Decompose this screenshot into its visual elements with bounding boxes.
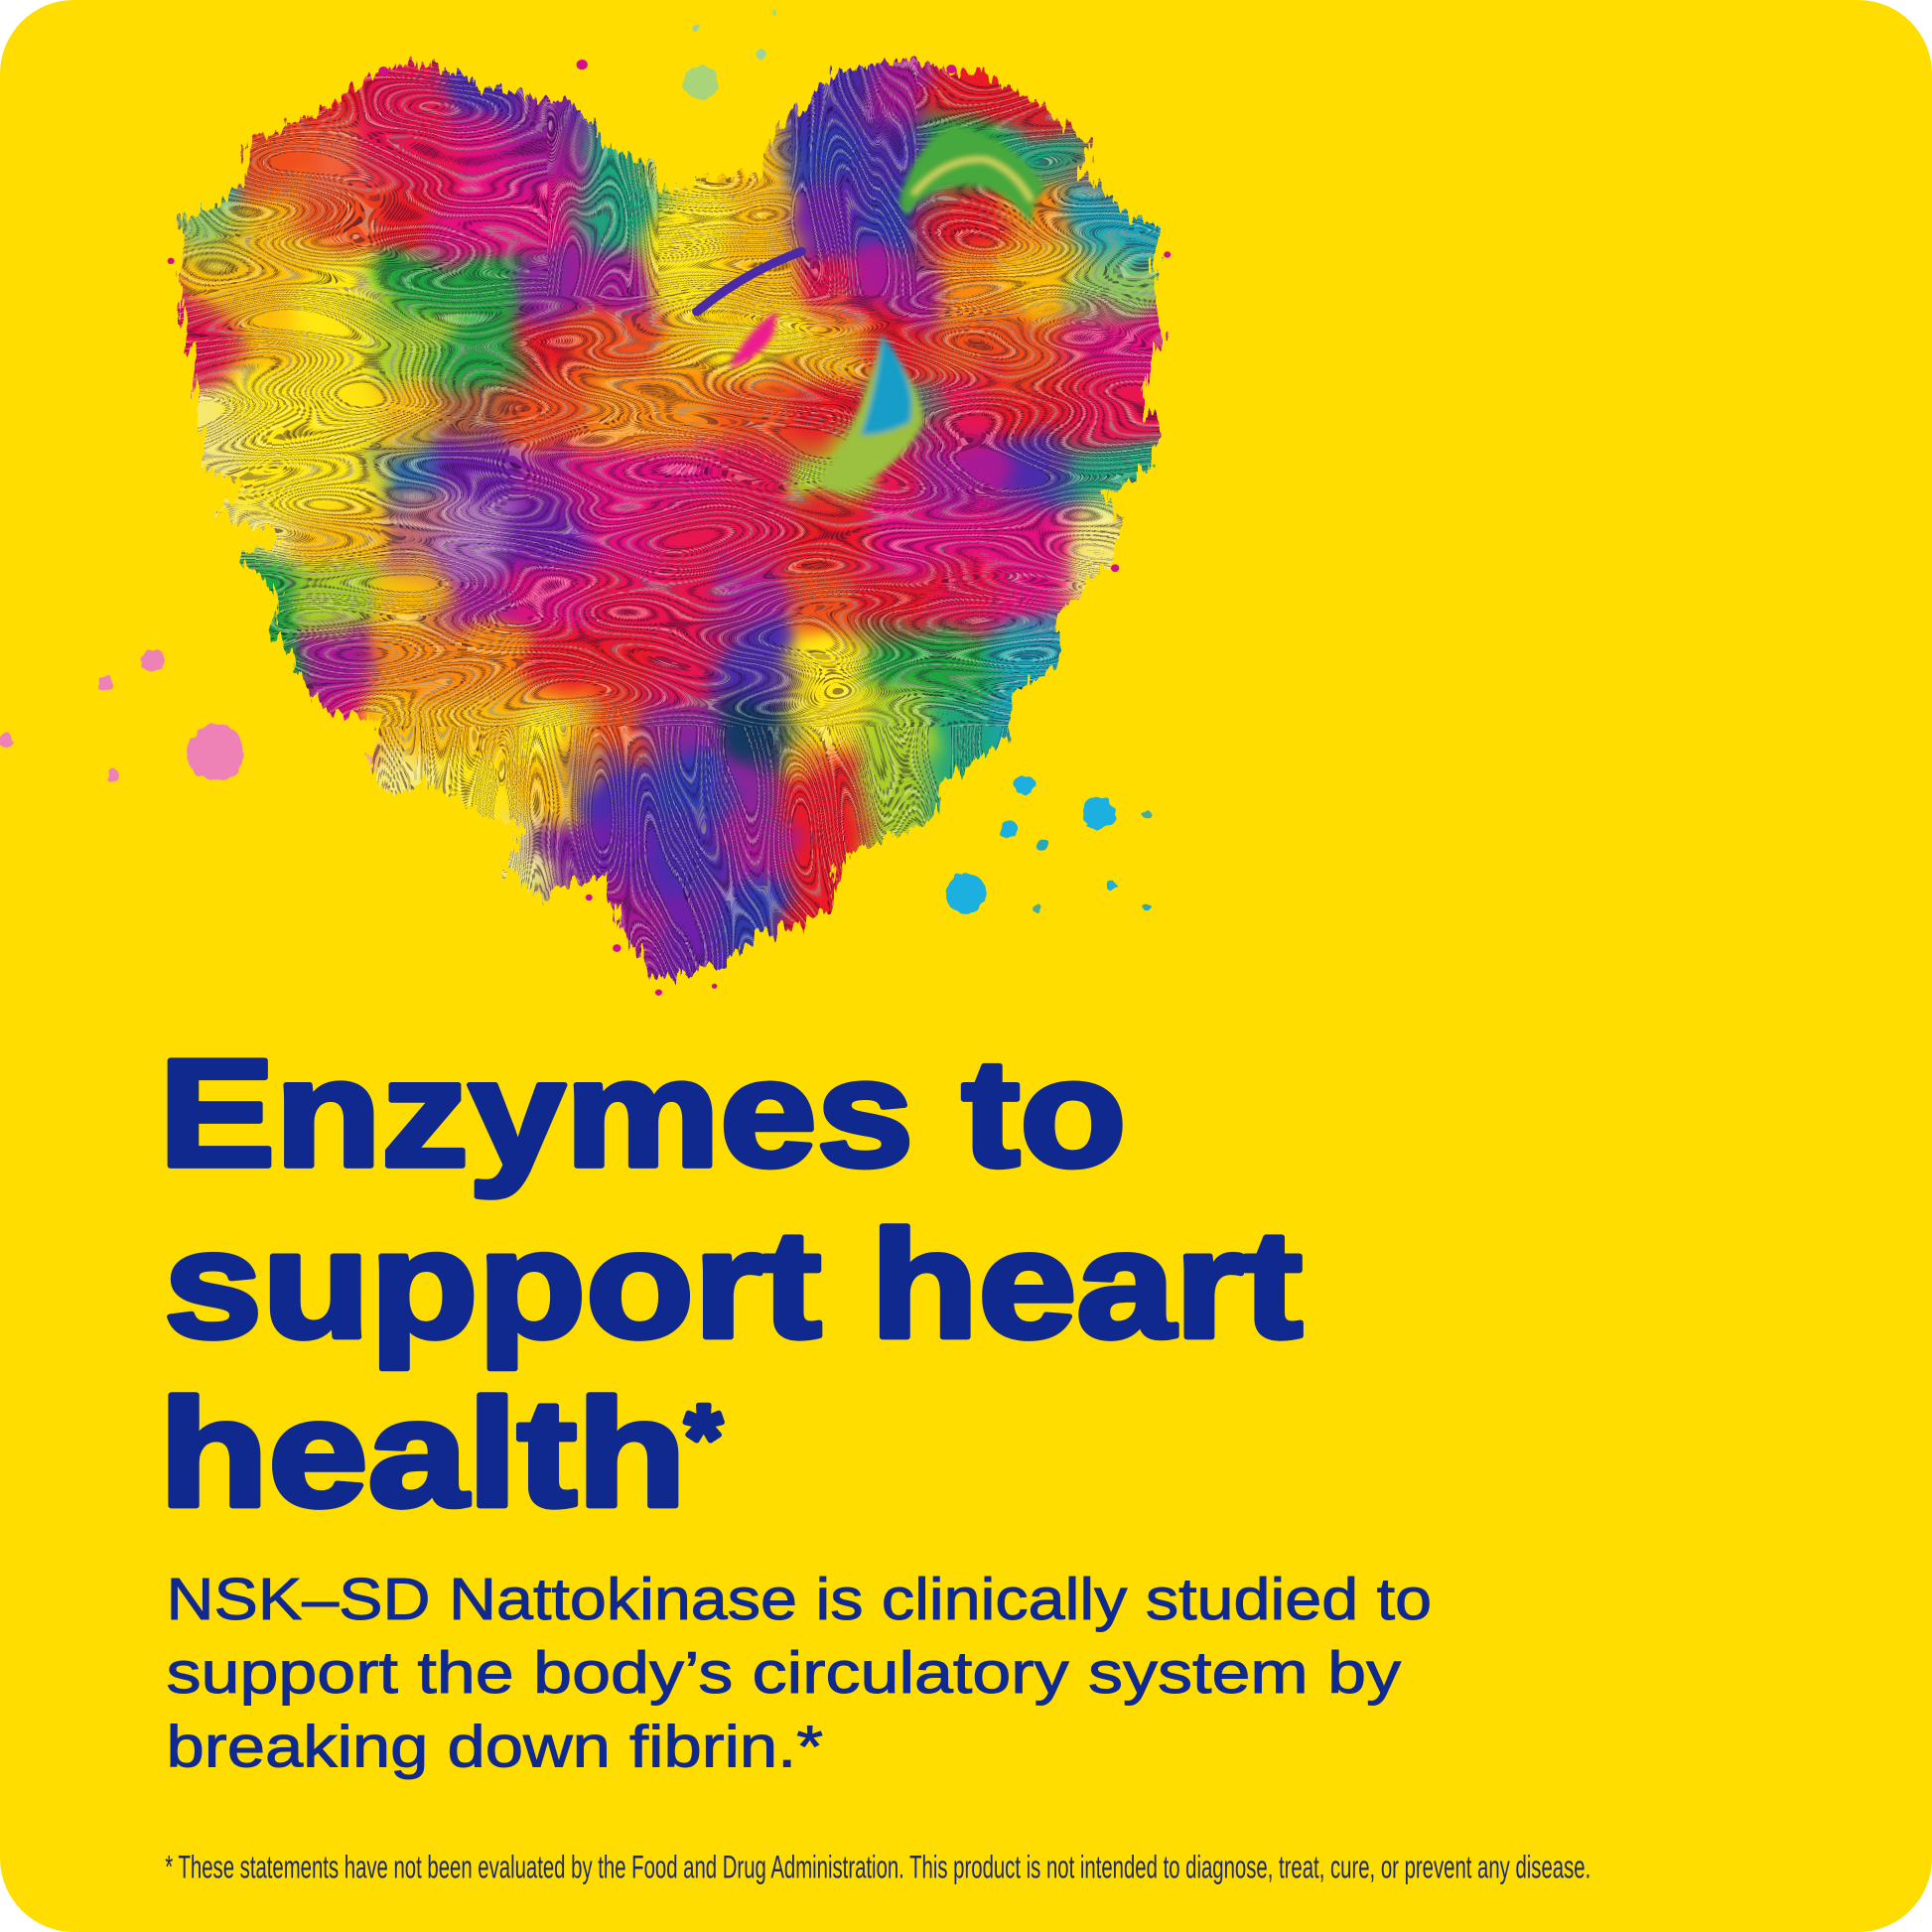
green paint splatter: [684, 10, 777, 100]
blue paint splatter: [946, 776, 1152, 913]
heading line 2: support heart: [164, 1199, 1303, 1370]
heading: [159, 1028, 1303, 1539]
pink paint splatter: [0, 648, 244, 781]
flowing dark paint lines: [176, 56, 1168, 985]
heading line 3: health: [159, 1368, 686, 1539]
heading asterisk: *: [685, 1386, 723, 1490]
body line 1: NSK–SD Nattokinase is clinically studied to: [167, 1566, 1432, 1632]
heading line 1: Enzymes to: [159, 1028, 1126, 1198]
heart colour mosaic: [176, 56, 1168, 985]
purple stripe accent: [697, 251, 801, 312]
feather: teal and yellow stroke: [819, 334, 923, 492]
body line 3: breaking down fibrin.*: [167, 1714, 823, 1780]
body line 2: support the body’s circulatory system by: [167, 1639, 1401, 1706]
feather: green leaf stroke: [899, 125, 1045, 226]
pink teardrop in yellow swirl: [729, 312, 777, 368]
body copy: [167, 1566, 1432, 1780]
spray dots along heart edge: [168, 60, 1171, 996]
icon: rainbow paint-swirl heart: [167, 56, 1172, 996]
flowing light paint lines: [177, 56, 1168, 981]
